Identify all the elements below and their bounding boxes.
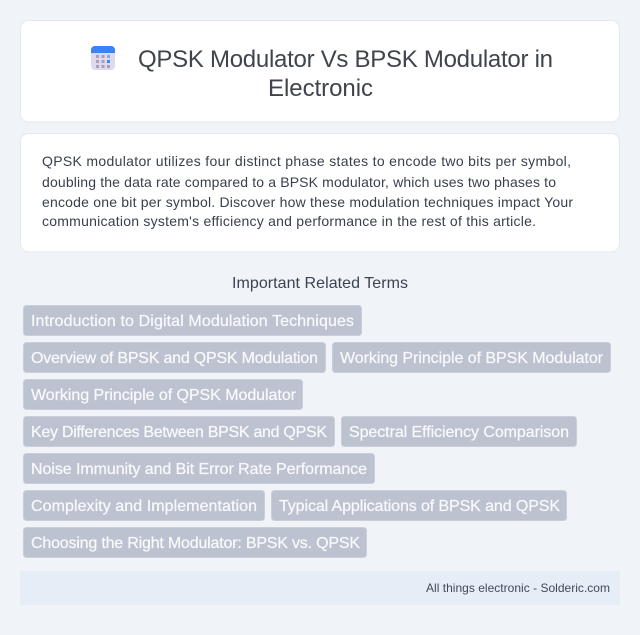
tag: BPSK principle: Working Principle of BPSK Modulator <box>340 350 604 367</box>
text block: summary: QPSK modulator utilizes four distinct phase states to encode two bits per symbol, <box>42 153 571 169</box>
tag: choosing: Choosing the Right Modulator: BPSK vs. QPSK <box>31 535 360 552</box>
heading: related terms: Important Related Terms <box>232 275 408 292</box>
tag: spectral efficiency: Spectral Efficiency Comparison <box>349 424 569 441</box>
footer: All things electronic - Solderic.com <box>426 581 610 595</box>
text block: summary: doubling the data rate compared to a BPSK modulator, which uses two phases to <box>42 174 556 190</box>
title: QPSK Modulator Vs BPSK Modulator in <box>138 46 553 73</box>
tag: overview: Overview of BPSK and QPSK Modulation <box>31 350 318 367</box>
tag: introduction: Introduction to Digital Modulation Techniques <box>31 313 354 330</box>
tag: overview <box>24 342 326 372</box>
panel: summary paragraph <box>20 134 620 252</box>
tag: noise immunity <box>24 454 374 484</box>
tag: noise immunity: Noise Immunity and Bit Error Rate Performance <box>31 461 367 478</box>
title: Electronic <box>268 75 373 102</box>
panel: title card <box>20 20 620 122</box>
tag: applications <box>272 490 566 520</box>
tag: applications: Typical Applications of BPSK and QPSK <box>279 498 560 515</box>
tag: spectral efficiency <box>342 416 576 446</box>
tag: QPSK principle: Working Principle of QPSK Modulator <box>31 387 297 404</box>
tag: complexity: Complexity and Implementation <box>31 498 257 515</box>
tag: key differences <box>24 416 334 446</box>
footer <box>20 571 620 605</box>
tag: BPSK principle <box>332 342 610 372</box>
tag: QPSK principle <box>24 380 302 410</box>
title <box>138 46 553 102</box>
text block: summary: communication system's efficiency and performance in the rest of this article. <box>42 213 536 229</box>
icon: calendar <box>91 46 115 70</box>
text block: summary: encode one bit per symbol. Discover how these modulation techniques impact Your <box>42 194 573 210</box>
tag list <box>24 306 610 558</box>
tag: complexity <box>24 490 264 520</box>
tag: key differences: Key Differences Between BPSK and QPSK <box>31 424 327 441</box>
tag: choosing <box>24 528 366 558</box>
text block: summary <box>42 153 573 229</box>
tag: introduction <box>24 306 362 336</box>
